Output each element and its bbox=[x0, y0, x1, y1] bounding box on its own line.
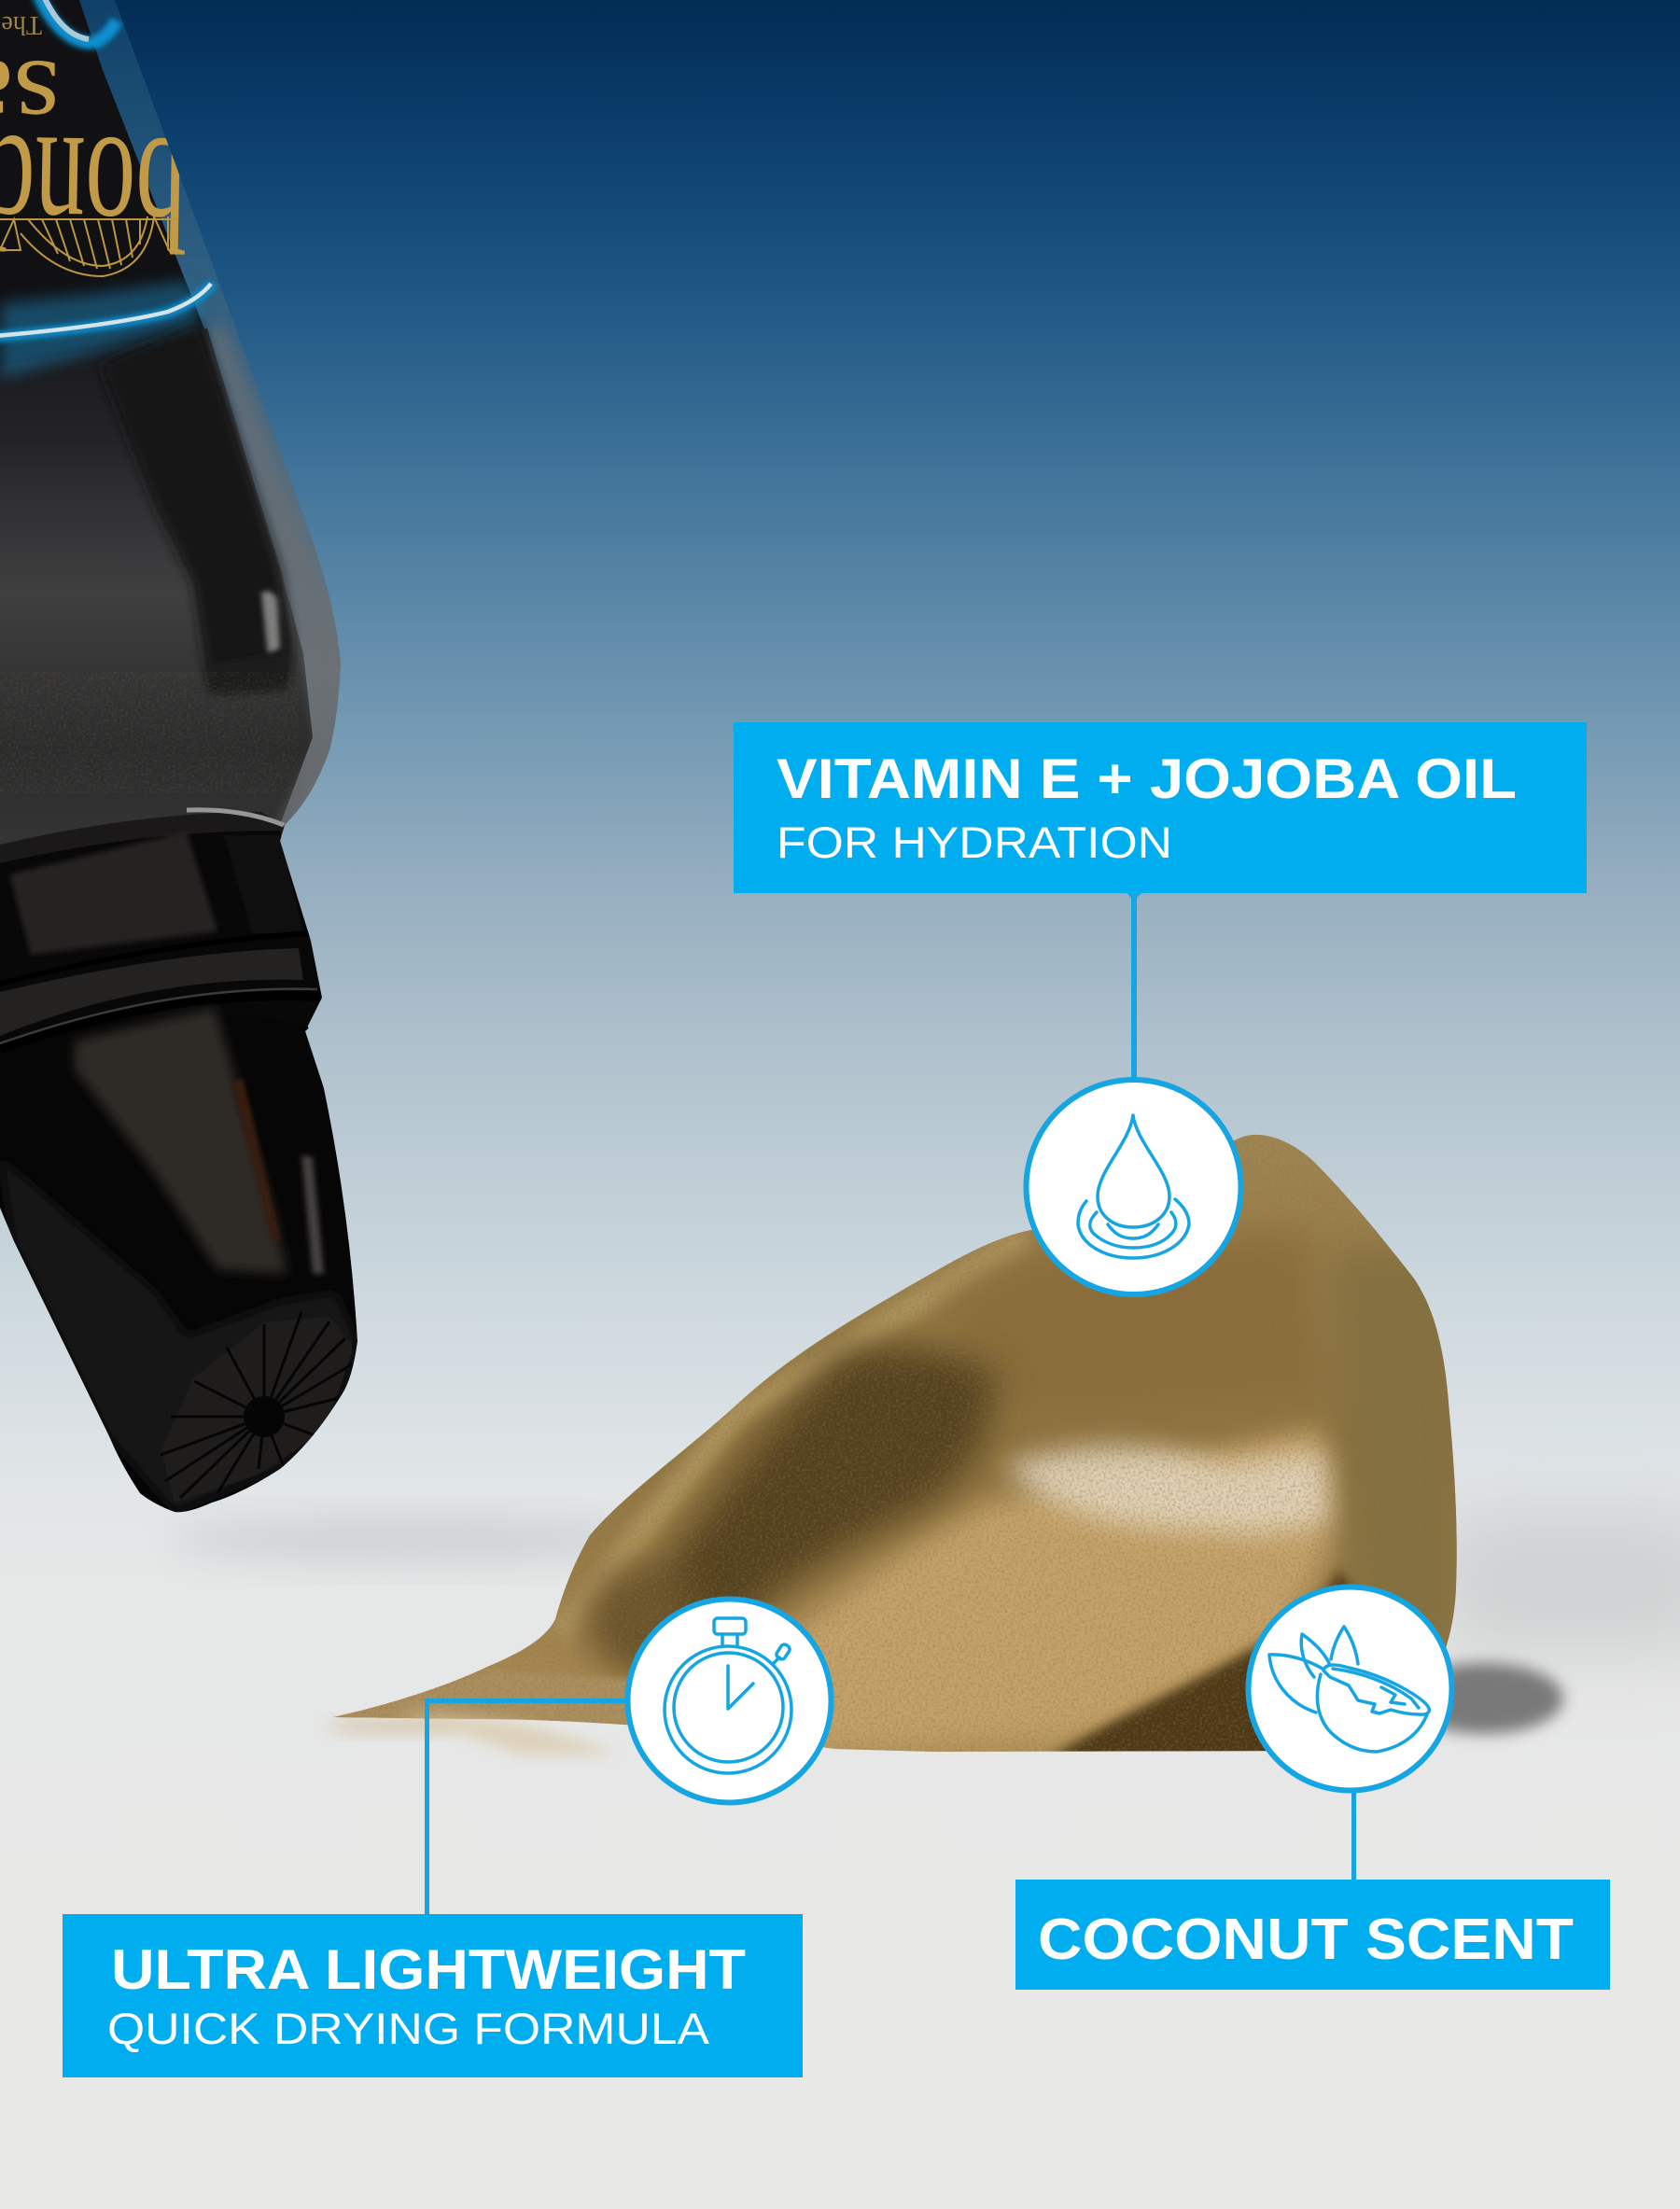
bottle lower body bbox=[0, 329, 313, 855]
bottle dark label section bbox=[0, 0, 207, 369]
right band bbox=[1330, 1251, 1465, 1661]
scoop lower shadow crescent bbox=[1048, 1568, 1381, 1764]
icon: water drop bbox=[1027, 1080, 1241, 1294]
product: paste swatch bbox=[317, 1120, 1475, 1773]
top mid tone bbox=[933, 1232, 1325, 1419]
callout: Ultra lightweight bbox=[63, 1914, 803, 2077]
connector: hydration bbox=[1127, 893, 1141, 1078]
brand wordmark bbox=[0, 17, 185, 255]
nozzle bbox=[0, 1013, 357, 1531]
blue halftone label band bbox=[0, 280, 201, 378]
bottle translucent shoulder bbox=[79, 0, 341, 839]
callout: Ultra lightweight: QUICK DRYING FORMULA bbox=[107, 2004, 710, 2053]
callout: Vitamin E + Jojoba oil: VITAMIN E + JOJOBA OIL bbox=[777, 748, 1517, 810]
callout: Coconut scent: COCONUT SCENT bbox=[1038, 1908, 1574, 1972]
connector: scent bbox=[1351, 1792, 1356, 1880]
top blue ring bbox=[37, 0, 117, 43]
floor shadows bbox=[168, 1512, 1680, 1736]
highlight bbox=[1003, 1447, 1330, 1533]
gold bridge line art bbox=[0, 217, 177, 276]
icon: coconut bbox=[1249, 1587, 1452, 1790]
callout: Coconut scent bbox=[1015, 1880, 1610, 1990]
light lower scoop bbox=[728, 1428, 1330, 1755]
nozzle reflection bbox=[75, 1008, 287, 1274]
callout: Vitamin E + Jojoba oil: FOR HYDRATION bbox=[777, 818, 1172, 867]
callout: Ultra lightweight: ULTRA LIGHTWEIGHT bbox=[111, 1938, 746, 2001]
dispensing tip bbox=[161, 1312, 352, 1503]
bottle reflection streak bbox=[100, 321, 292, 691]
glass edge fade bbox=[207, 327, 345, 825]
brand wordmark: The bbox=[1, 10, 42, 39]
collar reflection bbox=[9, 832, 217, 955]
icon: stopwatch bbox=[627, 1600, 831, 1803]
lower blue ring bbox=[0, 283, 213, 337]
connectors bbox=[425, 893, 1356, 1915]
black collar bbox=[0, 831, 322, 1055]
callout: Vitamin E + Jojoba oil bbox=[734, 722, 1587, 893]
ridge lip bbox=[560, 1237, 1027, 1633]
bottle speckle bbox=[0, 672, 299, 793]
scoop shadow bbox=[607, 1347, 999, 1671]
bottle neck ring bbox=[0, 812, 285, 863]
tail bbox=[333, 1671, 635, 1727]
connector: lightweight bbox=[425, 1699, 627, 1915]
product: bottle bbox=[0, 0, 373, 1531]
